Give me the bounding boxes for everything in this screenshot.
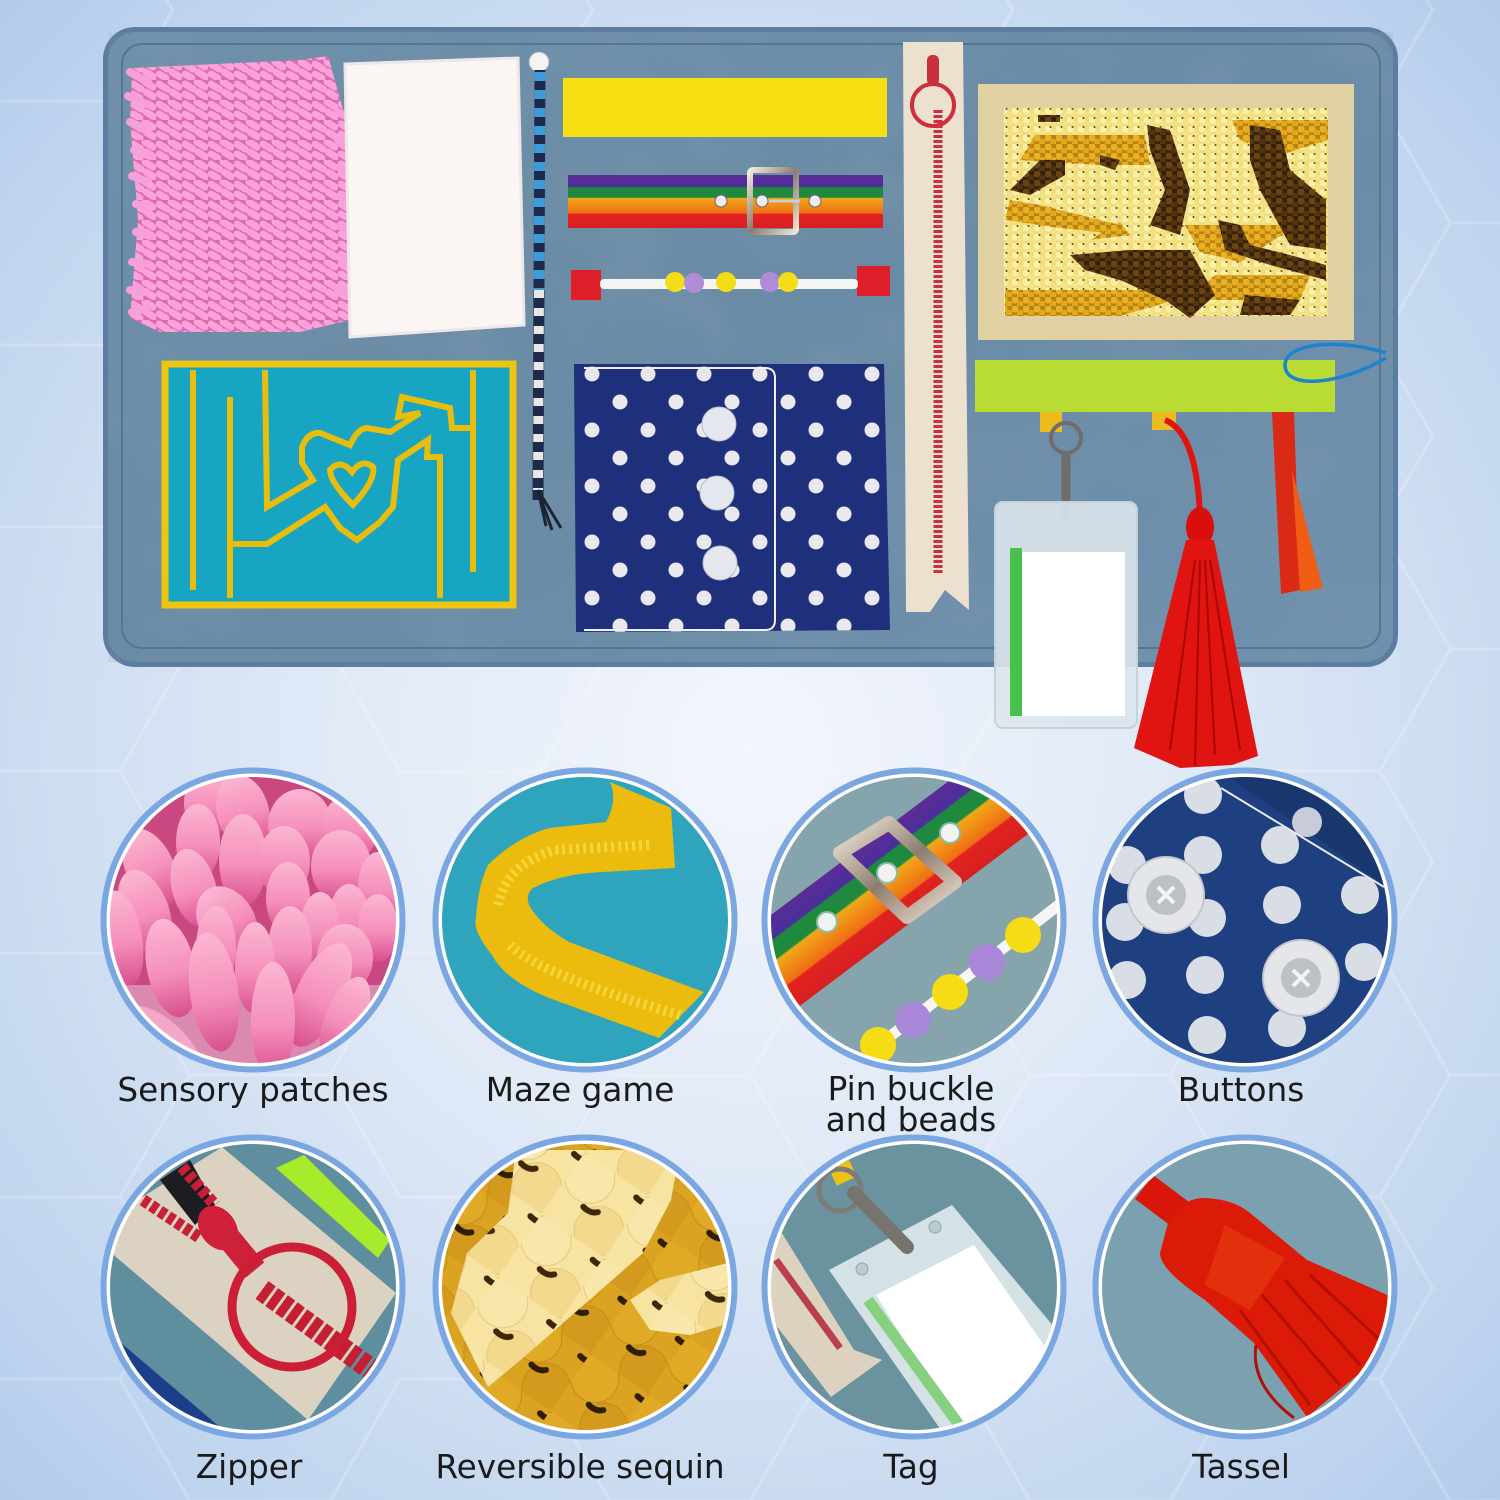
yellow strap bbox=[563, 78, 887, 137]
panel: tassel bbox=[1090, 1135, 1400, 1440]
label: tag: Tag bbox=[882, 1448, 939, 1486]
label: reversible sequin: Reversible sequin bbox=[435, 1448, 725, 1486]
panel: zipper bbox=[90, 1135, 410, 1440]
label: zipper: Zipper bbox=[196, 1448, 303, 1486]
white fur patch bbox=[345, 58, 524, 337]
maze patch bbox=[162, 360, 516, 608]
label: maze game: Maze game bbox=[486, 1071, 674, 1109]
sequin panel bbox=[978, 80, 1354, 340]
label: tassel: Tassel bbox=[1191, 1448, 1290, 1486]
clip and tag bbox=[995, 412, 1137, 728]
polka dot button pocket bbox=[574, 364, 890, 632]
panel: pin buckle and beads bbox=[762, 768, 1066, 1072]
beads bbox=[571, 266, 890, 300]
tassel bbox=[1134, 412, 1258, 768]
panel: maze game bbox=[430, 770, 740, 1070]
rainbow belt bbox=[568, 170, 883, 232]
green strap with blue loop bbox=[975, 344, 1386, 412]
pink chenille patch bbox=[128, 56, 350, 332]
braided cord bbox=[529, 52, 561, 530]
panel: reversible sequin bbox=[430, 1135, 740, 1440]
panel: buttons bbox=[1090, 770, 1400, 1070]
panel: sensory patches bbox=[100, 768, 406, 1072]
panel: sensory board bbox=[103, 27, 1398, 768]
label: pin buckle and beads bbox=[826, 1070, 996, 1139]
label: buttons: Buttons bbox=[1178, 1071, 1304, 1109]
label: pin buckle and beads: Pin buckle bbox=[828, 1070, 994, 1108]
label: sensory patches: Sensory patches bbox=[117, 1071, 389, 1109]
panel: tag bbox=[760, 1135, 1070, 1440]
orange ribbon bbox=[1272, 412, 1323, 594]
label: pin buckle and beads: and beads bbox=[826, 1101, 996, 1139]
zipper bbox=[903, 42, 969, 612]
